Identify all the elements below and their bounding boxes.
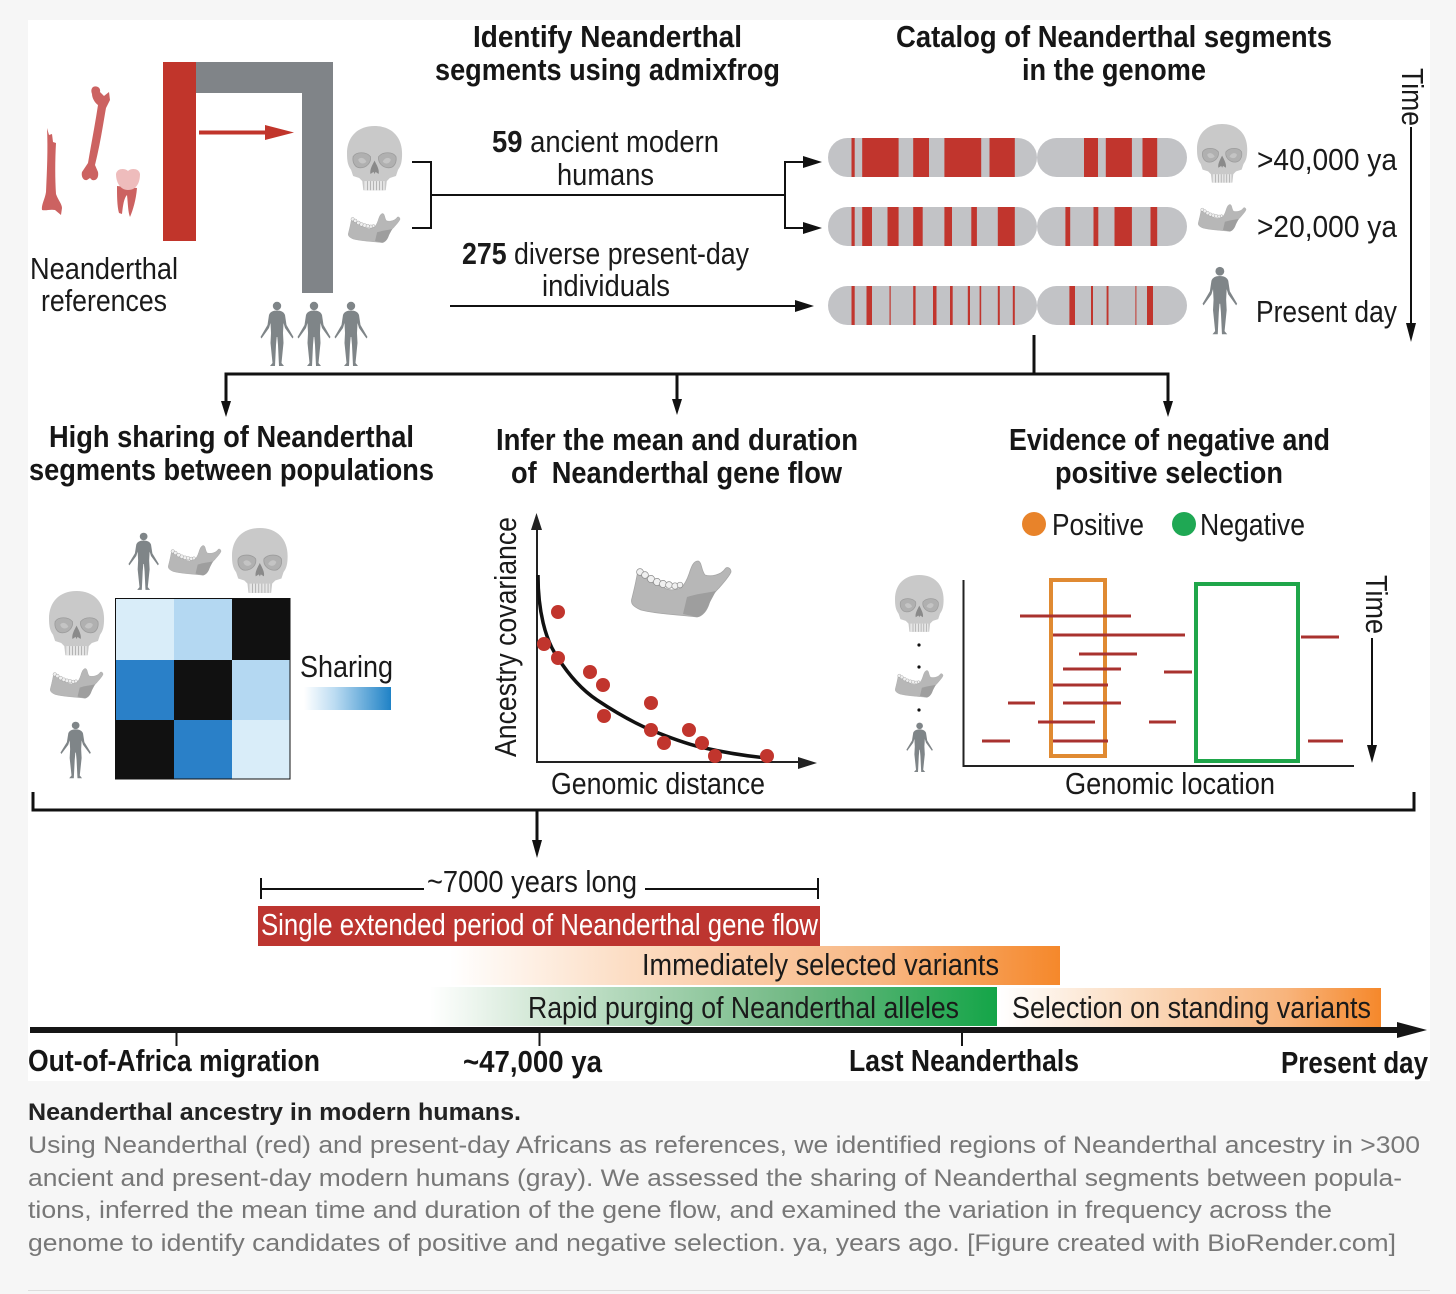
chart: selection along the genome (964, 580, 1354, 801)
timeline: 7000 years span (261, 864, 818, 899)
bar: immediately selected variants (450, 946, 1060, 985)
heading: identify segments: Identify Neanderthal (473, 19, 742, 54)
legend: sharing gradient (300, 649, 393, 710)
label: Neanderthal references: Neanderthal (30, 251, 178, 286)
caption: ancient and present-day modern humans (gray). We assessed the sharing of Neanderthal segments between popula- (28, 1165, 1402, 1192)
heading: high sharing: High sharing of Neanderthal (49, 419, 414, 454)
label: Neanderthal references: references (41, 283, 167, 318)
text: 59 ancient modern humans: 59 ancient modern (492, 124, 719, 159)
chart: selection along the genome: Genomic location (1065, 766, 1275, 801)
caption: tions, inferred the mean time and duration of the gene flow, and examined the variation in frequency across the (28, 1197, 1332, 1224)
heading: infer mean and duration: of Neanderthal gene flow (511, 455, 843, 490)
text: 275 diverse present-day individuals: individuals (542, 268, 670, 303)
heading: high sharing (29, 419, 434, 487)
chromosome: over 40,000 ya (828, 138, 1187, 177)
heading: evidence of selection: positive selection (1055, 455, 1283, 490)
icon: jaw for 20,000 ya (1198, 204, 1246, 231)
timeline label: 47,000 ya: ~47,000 ya (463, 1044, 603, 1079)
arrow: time axis selection chart (1359, 575, 1394, 763)
arrows: catalog splits into three analyses (221, 335, 1173, 417)
figure panel background (28, 20, 1430, 1081)
icon: large jaw (631, 561, 731, 617)
chart: ancestry covariance decay: Ancestry covariance (488, 517, 523, 757)
caption (28, 1099, 1420, 1257)
caption: Using Neanderthal (red) and present-day Africans as references, we identified regions of Neanderthal ancestry in >300 (28, 1132, 1420, 1159)
icon: skull for 40,000 ya (1197, 124, 1247, 183)
bar: gene flow period: Single extended period of Neanderthal gene flow (261, 907, 819, 942)
legend: sharing gradient: Sharing (300, 649, 393, 684)
chart: ancestry covariance decay (488, 513, 817, 801)
heading: evidence of selection: Evidence of negative and (1009, 422, 1330, 457)
caption: genome to identify candidates of positive and negative selection. ya, years ago. [Figure created with BioRender.com] (28, 1230, 1396, 1257)
icons: heatmap column headers (128, 528, 288, 593)
label: Neanderthal references (30, 251, 178, 318)
heatmap: sharing between populations (116, 598, 290, 779)
timeline: 7000 years span: ~7000 years long (427, 864, 637, 899)
icons: heatmap row headers (49, 591, 104, 778)
arrows: bracket from samples to catalog (412, 156, 822, 234)
icon: human for present day (1203, 267, 1237, 334)
timeline label: Out-of-Africa: Out-of-Africa migration (28, 1043, 320, 1078)
bar: immediately selected variants: Immediately selected variants (642, 947, 999, 982)
heading: identify segments (435, 19, 780, 87)
arrow: present-day individuals to catalog (450, 300, 814, 312)
icon: ancient skull (347, 126, 402, 190)
heading: catalog of segments: in the genome (1022, 52, 1206, 87)
chart: ancestry covariance decay: Genomic distance (551, 766, 765, 801)
arrow: time axis selection chart: Time (1359, 575, 1394, 634)
chromosome: over 20,000 ya (828, 207, 1187, 246)
text: 275 diverse present-day individuals (462, 236, 749, 303)
heading: infer mean and duration (496, 422, 858, 490)
timeline axis (30, 1022, 1427, 1046)
bracket and arrow to timeline (33, 792, 1414, 858)
caption: Neanderthal ancestry in modern humans. (28, 1099, 521, 1126)
icon: ancient jaw (348, 214, 400, 243)
heading: catalog of segments (896, 19, 1332, 87)
icon: three present-day humans (260, 302, 368, 366)
heading: high sharing: segments between populations (29, 452, 434, 487)
arrow: time axis top: Time (1395, 68, 1430, 126)
bar: selection on standing variants: Selection on standing variants (1012, 990, 1371, 1025)
heading: evidence of selection (1009, 422, 1330, 490)
admixture diagram: red Neanderthal and gray modern human bars (163, 62, 333, 293)
label: present day: Present day (1256, 294, 1397, 329)
legend: positive and negative selection (1022, 507, 1305, 542)
icon: Neanderthal bones (42, 86, 140, 217)
timeline label: present day: Present day (1281, 1045, 1429, 1080)
legend: positive and negative selection: Positive (1052, 507, 1144, 542)
bar: rapid purging: Rapid purging of Neanderthal alleles (528, 990, 959, 1025)
icons: time series samples (895, 575, 944, 772)
timeline label: last Neanderthals: Last Neanderthals (849, 1043, 1079, 1078)
heading: infer mean and duration: Infer the mean and duration (496, 422, 858, 457)
text: 59 ancient modern humans (492, 124, 719, 192)
label: over 40,000 ya: >40,000 ya (1257, 142, 1398, 177)
arrow: time axis top (1395, 68, 1430, 342)
heading: identify segments: segments using admixfrog (435, 52, 780, 87)
heading: catalog of segments: Catalog of Neanderthal segments (896, 19, 1332, 54)
text: 59 ancient modern humans: humans (557, 157, 654, 192)
legend: positive and negative selection: Negative (1200, 507, 1305, 542)
text: 275 diverse present-day individuals: 275 diverse present-day (462, 236, 749, 271)
chromosome: present day (828, 286, 1187, 325)
label: over 20,000 ya: >20,000 ya (1257, 209, 1398, 244)
